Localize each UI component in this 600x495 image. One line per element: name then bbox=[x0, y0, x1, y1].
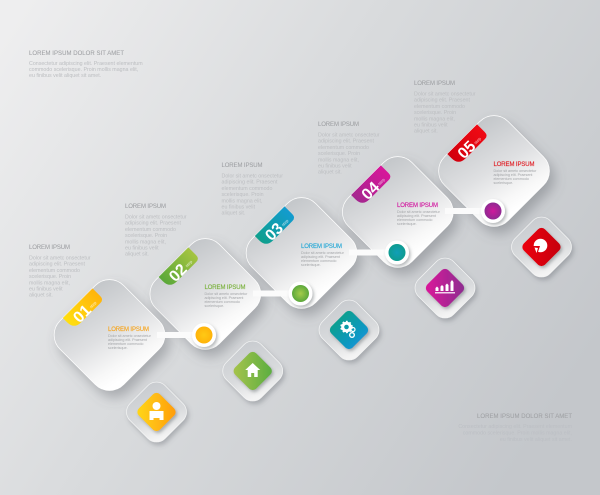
step 5 description: scelerisque. Proin bbox=[414, 110, 456, 116]
step 4 description bbox=[318, 122, 380, 176]
step 2 description: scelerisque. Proin bbox=[125, 233, 167, 239]
step 3 ribbon bbox=[255, 206, 296, 247]
step 5 card text: elementum commodo bbox=[494, 177, 529, 181]
step 4 description: adipiscing elit. Praesent bbox=[318, 139, 374, 145]
step 5 description: aliquet sit. bbox=[414, 129, 438, 135]
step 3 description: Dolor sit ametc onsectetur bbox=[222, 174, 283, 180]
step 4 card text: elementum commodo bbox=[397, 218, 432, 222]
step 1 number: 01 bbox=[70, 302, 95, 327]
step 2 ribbon bbox=[159, 247, 200, 288]
step 4 description: eu finibus velit bbox=[318, 164, 352, 170]
step 5 number bbox=[455, 131, 486, 163]
heading block: top left: eu finibus velit aliquet sit amet. bbox=[29, 73, 101, 79]
step 3 card text: scelerisque. bbox=[301, 263, 321, 267]
step 2 number: 02 bbox=[166, 261, 191, 286]
icon tile: person bbox=[122, 377, 191, 447]
step 2 card text bbox=[204, 285, 248, 308]
step 3 card bbox=[238, 189, 365, 317]
step 5 description: mollis magna elit, bbox=[414, 116, 455, 122]
step 2 card text: adipiscing elit. Praesent bbox=[204, 296, 243, 300]
step 4 card text: scelerisque. bbox=[397, 222, 417, 226]
step 5 card bbox=[430, 107, 558, 235]
step 1 card text: LOREM IPSUM bbox=[108, 327, 149, 333]
step 4 connector and dot bbox=[445, 199, 505, 223]
step 1 card text: scelerisque. bbox=[108, 346, 128, 350]
step 1 card text bbox=[108, 327, 152, 350]
step 4 description: aliquet sit. bbox=[318, 170, 342, 176]
step 1 description: elementum commodo bbox=[29, 268, 80, 274]
step 1 card bbox=[46, 271, 173, 399]
step 5 description: eu finibus velit bbox=[414, 122, 448, 128]
step 4 description: LOREM IPSUM bbox=[318, 122, 359, 128]
icon tile: house bbox=[218, 336, 288, 406]
step 2 description: LOREM IPSUM bbox=[125, 204, 166, 210]
step 1 bbox=[29, 245, 216, 399]
step 1 number: step bbox=[88, 300, 98, 309]
step 2 card text: scelerisque. bbox=[204, 304, 224, 308]
heading block: top left bbox=[29, 51, 143, 79]
step 3 description: adipiscing elit. Praesent bbox=[222, 180, 278, 186]
step 3 description: elementum commodo bbox=[222, 186, 272, 192]
icon tile: gears bbox=[314, 295, 384, 365]
heading block: top left: commodo scelerisque. Proin mollis magna elit, bbox=[29, 67, 138, 73]
step 4 number bbox=[359, 172, 390, 204]
step 1 description: mollis magna elit, bbox=[29, 280, 70, 286]
step 4 bbox=[318, 122, 505, 276]
step 4 description: scelerisque. Proin bbox=[318, 151, 360, 157]
heading block: bottom right: LOREM IPSUM DOLOR SIT AMET bbox=[477, 414, 572, 420]
step 1 description: scelerisque. Proin bbox=[29, 274, 71, 280]
step 4 number: 04 bbox=[359, 179, 383, 204]
step 3 number: 03 bbox=[262, 220, 287, 245]
step 2 card text: Dolor sit ametc onsectetur bbox=[204, 292, 248, 296]
heading block: top left: Consectetur adipiscing elit. Praesent elementum bbox=[29, 61, 143, 67]
step 2 description bbox=[125, 204, 187, 258]
step 5 card text: LOREM IPSUM bbox=[494, 162, 534, 168]
step 3 description: scelerisque. Proin bbox=[222, 192, 264, 198]
step 5 card text bbox=[494, 162, 537, 185]
step 5 description: Dolor sit ametc onsectetur bbox=[414, 92, 476, 98]
heading block: bottom right bbox=[458, 414, 573, 443]
step 2 card text: elementum commodo bbox=[204, 300, 240, 304]
icon tile: bar chart bbox=[410, 253, 480, 323]
step 5 description: LOREM IPSUM bbox=[414, 81, 455, 87]
step 4 description: mollis magna elit, bbox=[318, 157, 359, 163]
step 5 card text: scelerisque. bbox=[494, 181, 513, 185]
step 4 card text bbox=[397, 203, 441, 226]
step 1 connector and dot bbox=[157, 323, 216, 347]
heading block: top left: LOREM IPSUM DOLOR SIT AMET bbox=[29, 51, 124, 57]
step 5 card text: Dolor sit ametc onsectetur bbox=[494, 169, 537, 173]
step 5 ribbon bbox=[447, 124, 488, 165]
step 2 description: elementum commodo bbox=[125, 227, 176, 233]
step 3 card text: Dolor sit ametc onsectetur bbox=[301, 251, 345, 255]
icon tile: pie chart bbox=[507, 212, 576, 282]
heading block: bottom right: Consectetur adipiscing elit. Praesent elementum bbox=[458, 424, 573, 430]
step 1 card text: elementum commodo bbox=[108, 342, 143, 346]
step 3 number bbox=[262, 213, 294, 245]
step 4 number: step bbox=[377, 177, 386, 186]
step 2 description: mollis magna elit, bbox=[125, 239, 166, 245]
step 1 card text: adipiscing elit. Praesent bbox=[108, 338, 147, 342]
step 3 bbox=[222, 163, 409, 317]
step 5 description bbox=[414, 81, 476, 135]
step 1 description: eu finibus velit bbox=[29, 286, 63, 292]
step 3 description bbox=[222, 163, 283, 217]
step 2 description: adipiscing elit. Praesent bbox=[125, 221, 181, 227]
step 3 card text: elementum commodo bbox=[301, 259, 336, 263]
step 3 number: step bbox=[280, 218, 290, 227]
step 1 description: aliquet sit. bbox=[29, 293, 53, 299]
step 5 bbox=[414, 81, 558, 235]
step 1 description: LOREM IPSUM bbox=[29, 245, 70, 251]
step 5 description: elementum commodo bbox=[414, 104, 465, 110]
step 3 card text bbox=[301, 244, 345, 267]
step 2 description: eu finibus velit bbox=[125, 246, 159, 252]
step 4 ribbon bbox=[351, 165, 392, 206]
step 4 description: Dolor sit ametc onsectetur bbox=[318, 132, 380, 138]
step 3 description: eu finibus velit bbox=[222, 204, 256, 210]
heading block: bottom right: commodo scelerisque. Proin mollis magna elit, bbox=[463, 430, 572, 436]
step 1 description: adipiscing elit. Praesent bbox=[29, 262, 85, 268]
step 1 description bbox=[29, 245, 91, 299]
step 2 connector and dot bbox=[253, 282, 312, 306]
step 2 description: Dolor sit ametc onsectetur bbox=[125, 214, 187, 220]
step 3 connector and dot bbox=[349, 240, 409, 264]
step 2 card text: LOREM IPSUM bbox=[204, 285, 246, 291]
heading block: bottom right: eu finibus velit aliquet sit amet. bbox=[500, 437, 572, 443]
step 4 card text: adipiscing elit. Praesent bbox=[397, 214, 436, 218]
step 3 description: aliquet sit. bbox=[222, 211, 245, 217]
step 3 card text: adipiscing elit. Praesent bbox=[301, 255, 340, 259]
step 2 number: step bbox=[184, 259, 194, 268]
step 5 card text: adipiscing elit. Praesent bbox=[494, 173, 532, 177]
step 4 card text: LOREM IPSUM bbox=[397, 203, 438, 209]
step 2 bbox=[125, 204, 312, 358]
step 3 description: LOREM IPSUM bbox=[222, 163, 262, 169]
step 4 card bbox=[334, 148, 461, 276]
step 1 ribbon bbox=[63, 288, 104, 329]
step 1 card text: Dolor sit ametc onsectetur bbox=[108, 334, 152, 338]
step 2 card bbox=[142, 230, 269, 358]
step 1 description: Dolor sit ametc onsectetur bbox=[29, 256, 91, 262]
step 3 description: mollis magna elit, bbox=[222, 198, 262, 204]
step 2 number bbox=[166, 254, 198, 286]
step 5 number: 05 bbox=[455, 138, 480, 163]
step 5 description: adipiscing elit. Praesent bbox=[414, 98, 470, 104]
step 1 number bbox=[70, 295, 102, 327]
step 2 description: aliquet sit. bbox=[125, 252, 149, 258]
step 3 card text: LOREM IPSUM bbox=[301, 244, 342, 250]
step 4 description: elementum commodo bbox=[318, 145, 369, 151]
step 5 number: step bbox=[473, 136, 482, 145]
step 4 card text: Dolor sit ametc onsectetur bbox=[397, 210, 441, 214]
